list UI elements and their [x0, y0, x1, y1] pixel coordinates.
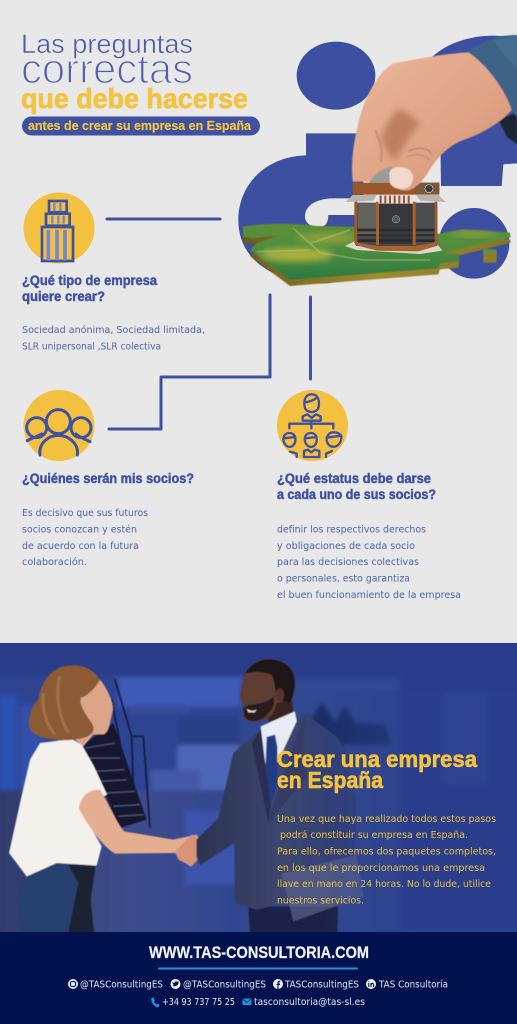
heading: tipo de empresa: ¿Qué tipo de empresa	[22, 273, 157, 288]
panel text: llave en mano en 24 horas. No lo dude, utilice	[277, 879, 491, 890]
text fade overlay	[325, 690, 517, 932]
text: estatus	[277, 524, 461, 601]
panel text: en los que le proporcionamos una empresa	[277, 863, 485, 874]
panel text: Para ello, ofrecemos dos paquetes completos,	[277, 846, 496, 858]
title: correctas	[21, 45, 193, 92]
photo panel: handshake in office	[0, 640, 517, 940]
icon: phone	[151, 998, 160, 1007]
connector line from map to status	[309, 297, 312, 379]
man	[197, 659, 363, 933]
title	[21, 29, 248, 114]
inverted question mark shapes	[238, 36, 517, 283]
website url: WWW.TAS-CONSULTORIA.COM	[149, 944, 369, 962]
panel text	[277, 814, 496, 906]
text: estatus: definir los respectivos derechos	[277, 524, 426, 536]
text: tipo de empresa: SLR unipersonal ,SLR colectiva	[22, 342, 161, 352]
heading: estatus: a cada uno de sus socios?	[277, 487, 436, 502]
icon: linkedin	[366, 979, 376, 989]
heading: socios: ¿Quiénes serán mis socios?	[22, 471, 194, 486]
icon: facebook	[273, 979, 283, 989]
text: estatus: para las decisiones colectivas	[277, 557, 419, 568]
instagram handle: @TASConsultingES	[80, 980, 163, 990]
connector line to first question	[107, 218, 220, 220]
people in handshake	[9, 659, 363, 933]
icon: building	[24, 192, 94, 264]
kiosk	[345, 166, 446, 254]
heading: tipo de empresa	[22, 273, 157, 304]
email address: tasconsultoria@tas-sl.es	[254, 997, 365, 1008]
title: que debe hacerse	[21, 83, 248, 114]
text: socios: Es decisivo que sus futuros	[22, 508, 148, 519]
footer	[0, 932, 517, 1024]
connector line from map to partners	[109, 295, 270, 429]
phone number: +34 93 737 75 25	[162, 997, 235, 1008]
heading: tipo de empresa: quiere crear?	[22, 289, 105, 304]
heading: estatus: ¿Qué estatus debe darse	[277, 471, 431, 486]
icon: twitter	[170, 979, 180, 989]
footer divider	[158, 968, 358, 970]
panel heading: en España	[277, 767, 383, 793]
title: Las preguntas	[21, 29, 193, 59]
text: estatus: el buen funcionamiento de la empresa	[277, 590, 461, 601]
staircase	[83, 680, 150, 828]
text: tipo de empresa	[22, 324, 205, 352]
text: estatus: o personales, esto garantiza	[277, 574, 410, 584]
panel text: Una vez que haya realizado todos estos pasos	[277, 814, 496, 825]
heading: estatus	[277, 471, 436, 502]
icon: organisation chart	[277, 390, 348, 461]
panel text: podrá constituir su empresa en España.	[280, 829, 468, 841]
map of Spain	[243, 224, 511, 286]
woman	[9, 666, 205, 933]
text: socios: de acuerdo con la futura	[22, 541, 139, 552]
panel heading	[277, 746, 477, 793]
text: socios	[22, 508, 148, 568]
panel text: nuestros servicios.	[277, 896, 364, 906]
panel heading: Crear una empresa	[277, 746, 477, 772]
icon: instagram	[68, 979, 78, 989]
icon: mail	[242, 998, 252, 1005]
linkedin name: TAS Consultoría	[378, 978, 448, 990]
text: socios: colaboración.	[22, 556, 87, 568]
hand	[352, 35, 517, 191]
text: tipo de empresa: Sociedad anónima, Sociedad limitada,	[22, 324, 205, 336]
office background	[0, 640, 517, 940]
hero illustration: question mark, map, kiosk and hand	[238, 35, 517, 286]
text: estatus: y obligaciones de cada socio	[277, 541, 415, 552]
facebook handle: TASConsultingES	[284, 980, 359, 990]
icon: partners group	[24, 390, 94, 461]
subtitle pill: antes de crear su empresa en España	[28, 118, 252, 133]
twitter handle: @TASConsultingES	[183, 980, 266, 990]
text: socios: socios conozcan y estén	[22, 524, 137, 536]
